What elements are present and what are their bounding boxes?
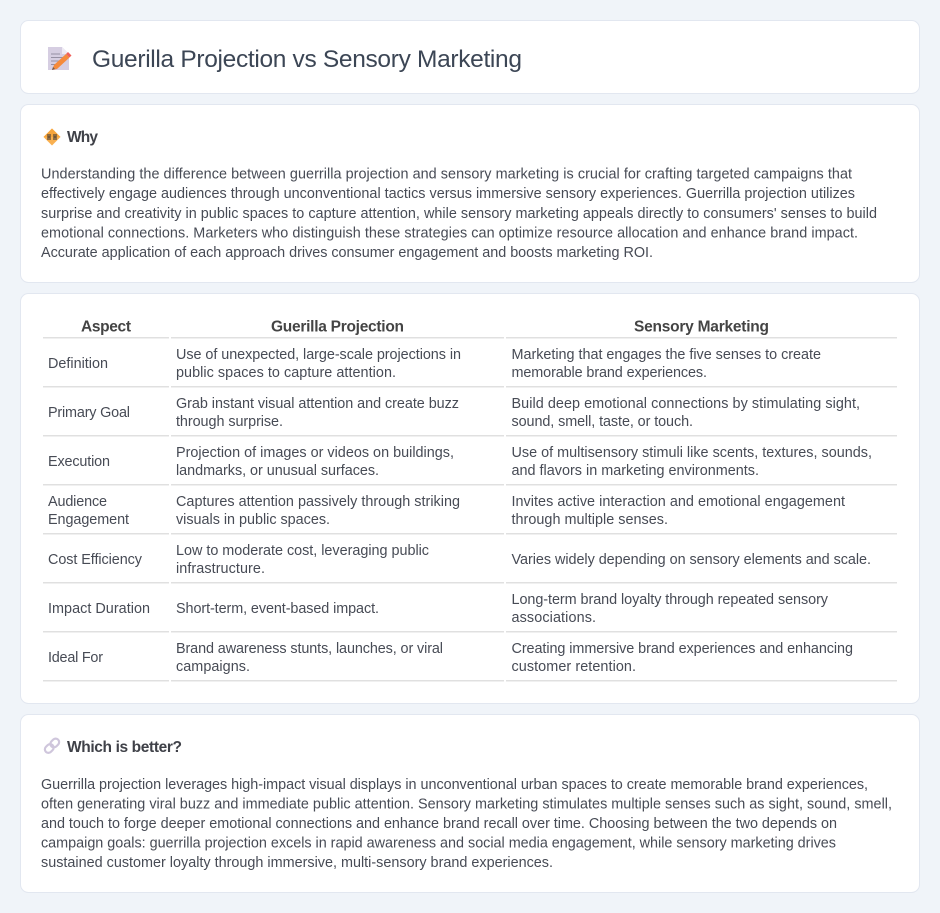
table row: Primary Goal: Build deep emotional connections by stimulating sight, <box>512 396 860 412</box>
table row: Primary Goal: Grab instant visual attention and create buzz <box>176 396 459 412</box>
text block: which is better paragraph: often generating viral buzz and immediate public attention. Sensory marketing stimulates multiple senses such as sight, sound, smell, <box>41 796 892 812</box>
text block: why paragraph: Accurate application of each approach drives consumer engagement and boosts marketing ROI. <box>41 245 653 261</box>
table row: Audience Engagement: visuals in public spaces. <box>176 512 330 528</box>
table header row: Guerilla Projection <box>271 318 404 336</box>
table row: Primary Goal <box>48 396 860 430</box>
panel: comparison table <box>20 294 920 704</box>
table row: Audience Engagement: through multiple senses. <box>512 512 668 528</box>
table row: Execution: Projection of images or videos on buildings, <box>176 445 454 461</box>
table row: Cost Efficiency <box>48 543 871 577</box>
table row: Ideal For: Ideal For <box>48 650 103 666</box>
table row: Definition <box>48 347 821 381</box>
panel: which is better <box>20 714 920 892</box>
table header row <box>81 318 769 336</box>
text block: why paragraph: emotional connections. Marketers who distinguish these strategies can optimize resource allocation and enhance brand impact. <box>41 226 858 242</box>
icon: memo with pencil <box>48 47 72 70</box>
table row: Cost Efficiency: infrastructure. <box>176 561 265 577</box>
table row: Definition: memorable brand experiences. <box>512 365 707 381</box>
table row: Impact Duration: Short-term, event-based impact. <box>176 601 379 617</box>
table row: Impact Duration: Impact Duration <box>48 601 150 617</box>
table row: Definition: public spaces to capture attention. <box>176 365 396 381</box>
icon: diamond warning sign <box>44 128 60 146</box>
table row: Definition: Marketing that engages the five senses to create <box>512 347 821 363</box>
table row: Cost Efficiency: Cost Efficiency <box>48 552 143 568</box>
table row: Primary Goal: through surprise. <box>176 414 283 430</box>
table row: Cost Efficiency: Low to moderate cost, leveraging public <box>176 543 429 559</box>
table row: Execution: and flavors in marketing environments. <box>512 463 759 479</box>
text block: which is better paragraph <box>41 777 892 871</box>
table row: Audience Engagement: Captures attention passively through striking <box>176 494 460 510</box>
panel: why <box>20 104 920 282</box>
text block: which is better paragraph: campaign goals: guerrilla projection excels in rapid awareness and social media engagement, while sensory marketing drives <box>41 836 836 852</box>
title: Guerilla Projection vs Sensory Marketing <box>92 46 522 73</box>
table row: Primary Goal: sound, smell, taste, or touch. <box>512 414 693 430</box>
table row: Execution <box>48 445 872 479</box>
table row: Impact Duration: Long-term brand loyalty through repeated sensory <box>512 592 829 608</box>
heading: which is better: Which is better? <box>67 739 182 756</box>
table row: Ideal For: Creating immersive brand experiences and enhancing <box>512 641 853 657</box>
table row: Definition: Use of unexpected, large-scale projections in <box>176 347 461 363</box>
table row: Audience Engagement <box>48 494 845 528</box>
table header row: Aspect <box>81 318 131 336</box>
text block: which is better paragraph: and touch to forge deeper emotional connections and enhance brand recall over time. Choosing between the two depends on <box>41 816 837 832</box>
table row: Impact Duration <box>48 592 829 626</box>
table row: Cost Efficiency: Varies widely depending on sensory elements and scale. <box>512 552 871 568</box>
table header row: Sensory Marketing <box>634 318 769 336</box>
table row: Impact Duration: associations. <box>512 610 596 626</box>
table row: Audience Engagement: Engagement <box>48 512 129 528</box>
table row: Ideal For: Brand awareness stunts, launches, or viral <box>176 641 443 657</box>
text block: why paragraph: surprise and creativity in public spaces to capture attention, while sensory marketing appeals directly to consumers' senses to build <box>41 206 877 222</box>
table row: Ideal For: customer retention. <box>512 659 636 675</box>
icon: chain link <box>43 737 61 754</box>
table row: Execution: Use of multisensory stimuli like scents, textures, sounds, <box>512 445 872 461</box>
table row: Ideal For: campaigns. <box>176 659 250 675</box>
table row: Definition: Definition <box>48 356 108 372</box>
table row: Audience Engagement: Audience <box>48 494 107 510</box>
text block: why paragraph: Understanding the difference between guerrilla projection and sensory marketing is crucial for crafting targeted campaigns that <box>41 166 852 182</box>
table row: Audience Engagement: Invites active interaction and emotional engagement <box>512 494 845 510</box>
text block: which is better paragraph: Guerrilla projection leverages high-impact visual displays in unconventional urban spaces to create memorable brand experiences, <box>41 777 868 793</box>
heading: why: Why <box>67 129 98 146</box>
panel: title header <box>20 20 920 94</box>
table row: Execution: Execution <box>48 454 110 470</box>
text block: why paragraph <box>41 166 877 261</box>
table row: Execution: landmarks, or unusual surfaces. <box>176 463 379 479</box>
table row: Ideal For <box>48 641 853 675</box>
table row: Primary Goal: Primary Goal <box>48 405 130 421</box>
text block: which is better paragraph: sustained customer loyalty through immersive, multi-sensory brand experiences. <box>41 855 553 871</box>
text block: why paragraph: effectively engage audiences through unconventional tactics versus immersive sensory experiences. Guerrilla projection utilizes <box>41 186 855 202</box>
